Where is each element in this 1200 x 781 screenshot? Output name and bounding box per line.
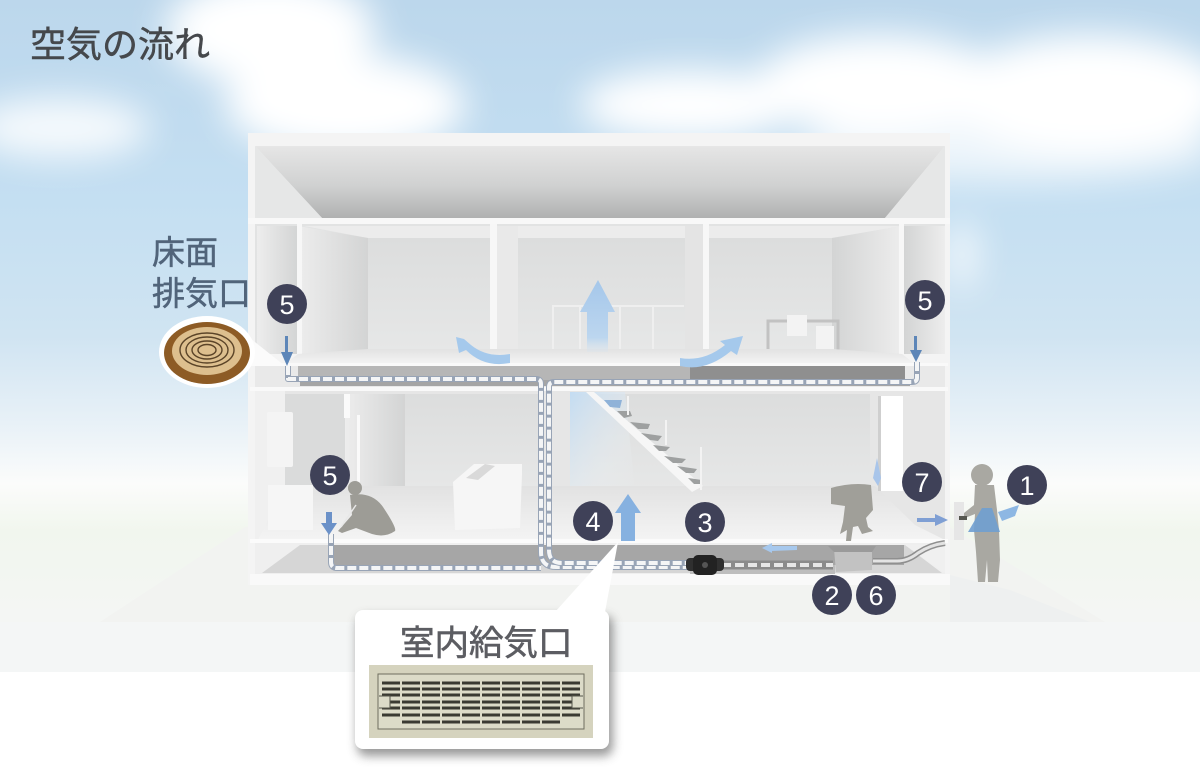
- badge 5 upper right: [905, 280, 945, 320]
- wall cabinet: [267, 412, 293, 467]
- badge 2: [812, 575, 852, 615]
- label: floor exhaust: 排気口: [152, 275, 251, 312]
- badge 4: 4: [585, 507, 601, 537]
- air flow arrows: [281, 280, 1019, 553]
- number badges: [267, 280, 1047, 615]
- badge 7: [902, 462, 942, 502]
- badge 4: [573, 501, 613, 541]
- supply grille: [369, 665, 593, 738]
- partitions: [297, 224, 302, 354]
- house outer shell: [248, 133, 950, 585]
- desk: [768, 315, 838, 351]
- left closet: [257, 226, 298, 354]
- person: bent over: [831, 484, 873, 541]
- clouds: [0, 0, 1200, 290]
- ground: [0, 527, 1200, 781]
- badge 3: 3: [697, 508, 713, 538]
- crawl space: [250, 539, 950, 585]
- callout shadow: [357, 616, 613, 756]
- floor: [285, 349, 915, 364]
- vanity: [268, 485, 313, 530]
- badge 5 upper left: 5: [279, 290, 295, 320]
- curved arrow right: [680, 336, 743, 367]
- callout box: [355, 610, 609, 749]
- stair glow: [570, 392, 635, 490]
- stairs: [586, 392, 703, 492]
- skirt tint: [968, 508, 1000, 532]
- second floor rooms: [255, 224, 945, 364]
- title: 空気の流れ: [30, 24, 210, 65]
- callout pointer: [555, 542, 618, 612]
- arrow in crawl space: [762, 543, 797, 553]
- arrow 5 lower: [321, 512, 337, 535]
- room 2: [497, 226, 703, 238]
- window: [878, 396, 903, 491]
- badge 2: 2: [824, 581, 840, 611]
- house cutaway: [248, 133, 950, 585]
- attic: [255, 146, 945, 218]
- room 3: [708, 226, 902, 238]
- arrow near 4: [615, 494, 641, 541]
- badge 5 upper left: [267, 284, 307, 324]
- intake wedge: [998, 505, 1019, 521]
- first floor floor surface: [258, 486, 945, 540]
- label: floor exhaust: 床面: [152, 234, 218, 271]
- floor exhaust vent callout: [159, 316, 285, 388]
- person: kneeling: [338, 481, 395, 535]
- badge 1: 1: [1019, 471, 1035, 501]
- duct fan: [686, 555, 724, 575]
- badge 6: [856, 575, 896, 615]
- callout label: 室内給気口: [400, 625, 572, 663]
- badge 1: [1007, 465, 1047, 505]
- badge 5 lower: 5: [322, 461, 338, 491]
- arrow from window: [873, 458, 881, 486]
- arrow 5 upper right: [910, 336, 922, 362]
- supply vent callout: [355, 542, 618, 756]
- ventilation ducts: [288, 362, 945, 568]
- arrow to controller: [917, 514, 948, 526]
- badge 5 lower: [310, 455, 350, 495]
- vent pointer: [250, 338, 285, 366]
- arrow 5 upper left: [281, 336, 293, 366]
- badge 5 upper right: 5: [917, 286, 933, 316]
- room 1: [304, 226, 490, 238]
- curved arrow left: [456, 337, 510, 364]
- label: floor exhaust: [152, 234, 251, 312]
- first floor rooms: [255, 391, 945, 541]
- railing: [553, 306, 684, 352]
- badge 3: [685, 502, 725, 542]
- person: standing woman: [959, 464, 1000, 582]
- vent disc: [159, 316, 255, 388]
- badge 7: 7: [914, 468, 930, 498]
- second floor slab: [250, 363, 948, 391]
- badge 6: 6: [868, 581, 884, 611]
- big up arrow: [580, 280, 615, 352]
- wall controller: [954, 502, 967, 540]
- bathtub: [453, 464, 522, 530]
- fan unit: [828, 546, 876, 572]
